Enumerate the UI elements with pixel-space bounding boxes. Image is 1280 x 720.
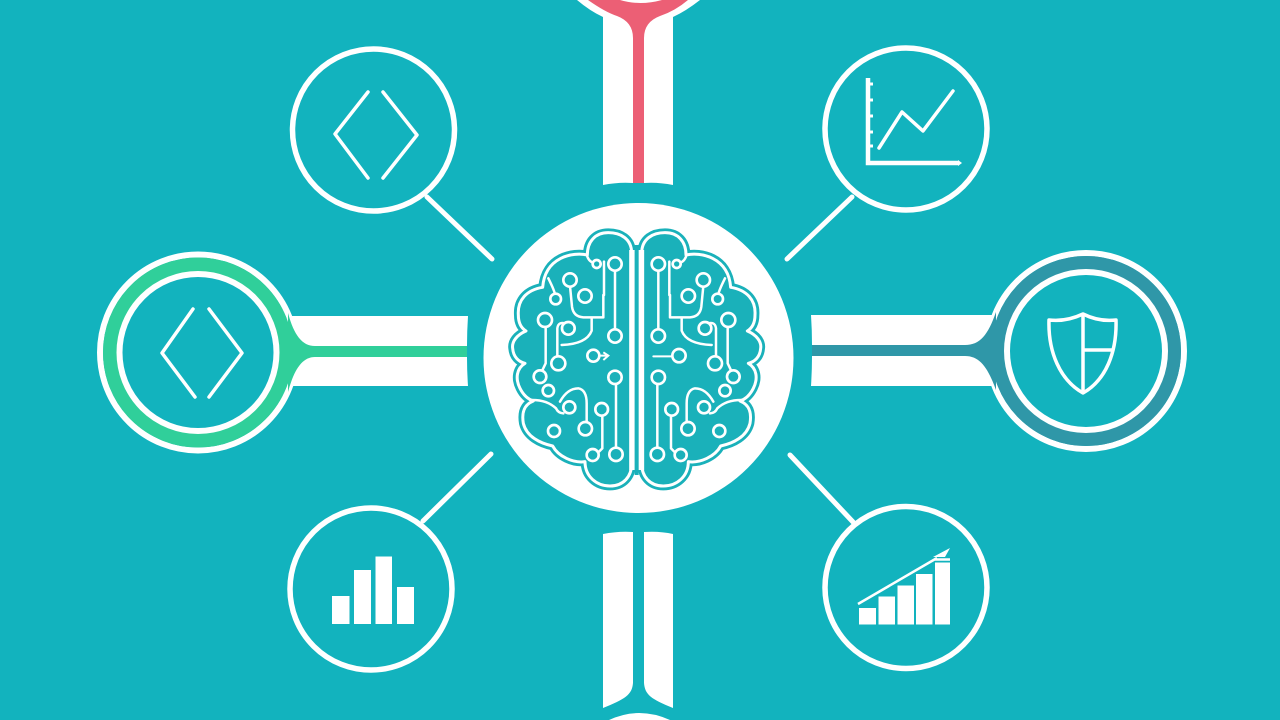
left hemisphere [513,233,632,486]
magnifier: growth chart (bottom right) [790,455,987,668]
icon: growth bars with trend arrow [858,548,950,624]
right centre node [653,349,686,362]
central hub circle [484,203,794,513]
icon: code brackets [162,309,242,397]
icon: shield [1049,314,1116,393]
brain circuit icon [513,233,761,486]
left centre node [587,350,608,362]
magnifier: bar chart (bottom left) [290,454,491,670]
midline gap [635,245,639,475]
left connector: green lollipop with code icon [100,254,468,450]
right hemisphere [641,233,761,486]
magnifier: code (top left) [292,49,492,259]
icon: bar chart [332,556,414,624]
bottom connector: teal lollipop [603,532,673,720]
icon: line chart [868,78,962,166]
magnifier: line chart (top right) [787,48,987,259]
top connector: red lollipop [577,0,700,185]
icon: code brackets [335,92,417,178]
right connector: dark teal lollipop with shield icon [811,253,1184,449]
